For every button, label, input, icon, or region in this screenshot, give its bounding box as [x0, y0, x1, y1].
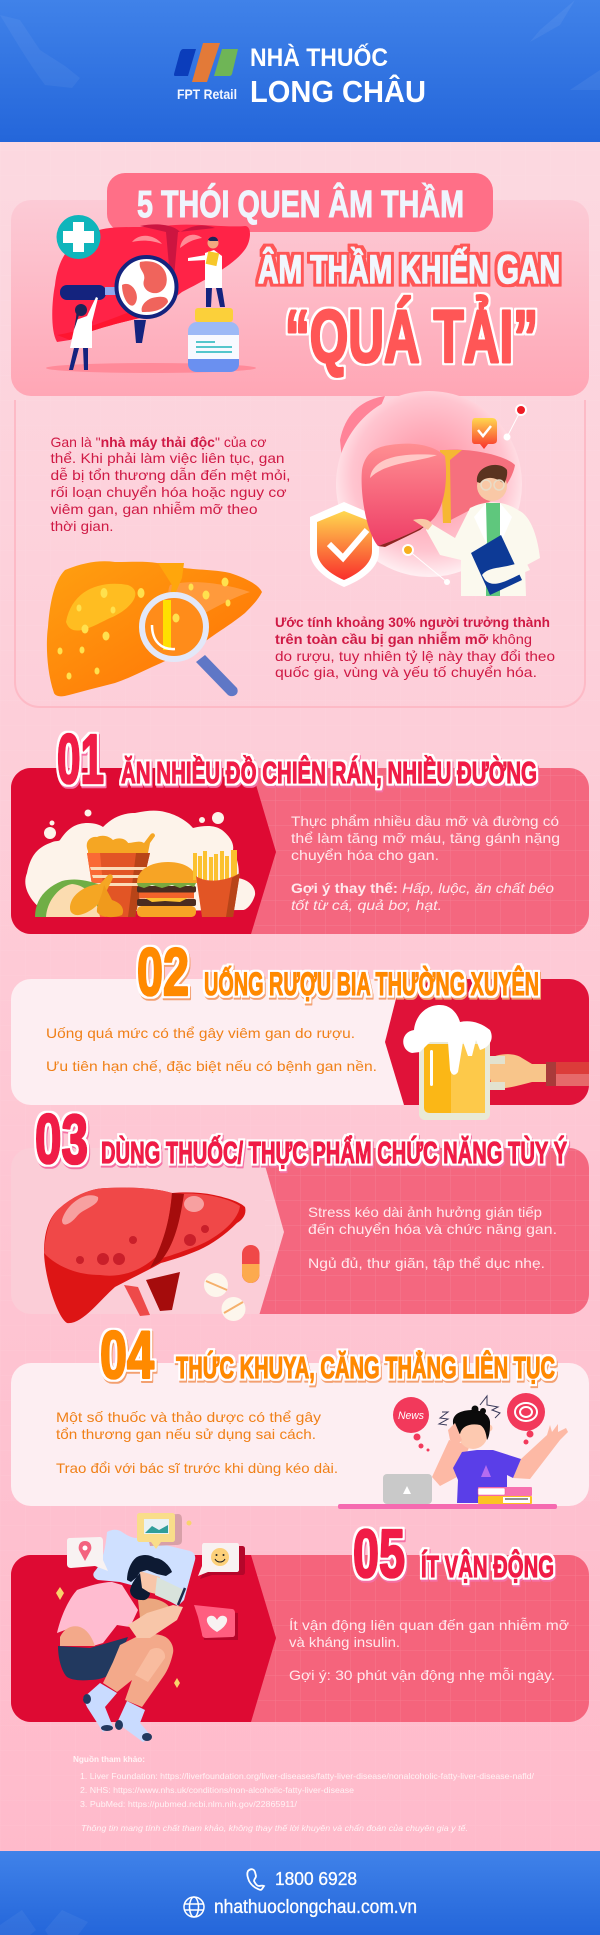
- doctor: man: [188, 237, 225, 307]
- icon: check badge: [472, 418, 497, 449]
- pink liver: [362, 444, 515, 547]
- footer band: [0, 1851, 600, 1935]
- text 01: chuyển hóa cho gan.: [291, 847, 439, 863]
- pill bottle: [188, 308, 239, 372]
- icon: medical cross: [56, 215, 100, 259]
- references: Thông tin mang tính chất tham khảo, không thay thế lời khuyên và chẩn đoán của chuyên gia y tế.: [81, 1823, 468, 1833]
- laptop: [383, 1474, 432, 1504]
- text 03: Ngủ đủ, thư giãn, tập thể dục nhẹ.: [308, 1255, 545, 1271]
- fries: [193, 850, 240, 917]
- brand name: [250, 42, 426, 109]
- website: nhathuoclongchau.com.vn: [214, 1897, 417, 1918]
- bubble: location pin: [67, 1537, 108, 1571]
- panel: 04: [11, 1318, 589, 1509]
- text 02: [46, 1025, 377, 1074]
- arm: [128, 1605, 183, 1638]
- connector dots: [402, 404, 527, 585]
- references: 2. NHS: https://www.nhs.uk/conditions/non-alcoholic-fatty-liver-disease: [80, 1785, 354, 1795]
- illustration: beer mug and hand: [403, 1005, 589, 1120]
- shirt: [57, 1582, 138, 1646]
- brand name: NHÀ THUỐC: [250, 42, 388, 72]
- phone number: 1800 6928: [275, 1869, 357, 1889]
- heading 04: [100, 1318, 555, 1393]
- legs: [103, 1634, 173, 1707]
- head: [127, 1555, 185, 1605]
- panel: 03: [11, 1100, 589, 1323]
- text 03: đến chuyển hóa và chức năng gan.: [308, 1221, 557, 1237]
- intro paragraph: thời gian.: [50, 518, 114, 534]
- bubble: smiley: [198, 1543, 245, 1579]
- heading 03: [35, 1100, 567, 1178]
- illustration: liver with doctors and magnifier: [46, 215, 256, 373]
- stats paragraph: trên toàn cầu bị gan nhiễm mỡ không: [275, 631, 532, 647]
- socks: [83, 1683, 152, 1742]
- intro paragraph: dễ bị tổn thương dẫn đến mệt mỏi,: [50, 467, 290, 483]
- text 01: Thực phẩm nhiều dầu mỡ và đường có: [291, 813, 559, 829]
- chest: [138, 1598, 170, 1618]
- icon: phone: [247, 1869, 264, 1890]
- heading 05: [353, 1516, 554, 1592]
- text 05: và kháng insulin.: [289, 1634, 400, 1650]
- text 03: Stress kéo dài ảnh hưởng gián tiếp: [308, 1204, 542, 1220]
- pills: [204, 1245, 260, 1321]
- stats paragraph: Ước tính khoảng 30% người trưởng thành: [275, 614, 550, 630]
- heading 02: [137, 935, 539, 1010]
- bubble: heart: [194, 1605, 238, 1640]
- stats paragraph: quốc gia, vùng và yếu tố chuyển hóa.: [275, 664, 537, 680]
- bubble: news: News: [398, 1410, 424, 1422]
- text 02: Ưu tiên hạn chế, đặc biệt nếu có bệnh gan nền.: [46, 1058, 377, 1074]
- brand name: LONG CHÂU: [250, 73, 426, 109]
- header band: [0, 0, 600, 142]
- panel: 05: [11, 1513, 589, 1742]
- stats paragraph: do rượu, tuy nhiên tỷ lệ này thay đổi theo: [275, 648, 555, 664]
- bubble: scribble: [507, 1393, 545, 1444]
- intro paragraph: Gan là "nhà máy thải độc" của cơ: [50, 434, 266, 450]
- heading 04: 04: [100, 1318, 154, 1393]
- heading 03: 03: [35, 1100, 88, 1178]
- text 02: Uống quá mức có thể gây viêm gan do rượu.: [46, 1025, 355, 1041]
- text 05: [289, 1617, 569, 1683]
- main heading: [258, 246, 560, 378]
- text 01: tốt từ cá, quả bơ, hạt.: [291, 897, 442, 913]
- illustration: red liver with pills: [44, 1188, 260, 1323]
- text 03: [308, 1204, 557, 1271]
- chicken pieces: [70, 874, 123, 917]
- doctor: woman: [69, 297, 98, 370]
- burger: [137, 862, 197, 917]
- text 04: Một số thuốc và thảo dược có thể gây: [56, 1409, 321, 1425]
- panel: 02: [11, 935, 589, 1120]
- heading 05: 05: [353, 1516, 405, 1592]
- pillow: [93, 1530, 195, 1606]
- taco: [35, 880, 100, 917]
- heading 01: 01: [57, 720, 104, 798]
- doctor: [413, 465, 540, 596]
- references: 3. PubMed: https://pubmed.ncbi.nlm.nih.gov/22865911/: [80, 1799, 298, 1809]
- references: 1. Liver Foundation: https://liverfoundation.org/liver-diseases/fatty-liver-disease/nonalcoholic-fatty-liver-disease-nafld/: [80, 1771, 535, 1781]
- text 01: thể làm tăng mỡ máu, tăng gánh nặng: [291, 830, 560, 846]
- bubble: news: [393, 1397, 430, 1452]
- text 05: Ít vận động liên quan đến gan nhiễm mỡ: [289, 1617, 569, 1633]
- intro paragraph: viêm gan, gan nhiễm mỡ theo: [50, 501, 258, 517]
- panel: 01: [11, 720, 589, 934]
- heading 02: 02: [137, 935, 189, 1010]
- logo: FPT Retail: [174, 43, 238, 102]
- text 01: [291, 813, 560, 913]
- heading 01: [57, 720, 537, 798]
- illustration: fast food: [25, 810, 255, 917]
- intro paragraph: thể. Khi phải làm việc liên tục, gan: [50, 450, 284, 466]
- text 01: Gợi ý thay thế: Hấp, luộc, ăn chất béo: [291, 880, 554, 896]
- references: [73, 1754, 535, 1833]
- text 04: tổn thương gan nếu sử dụng sai cách.: [56, 1426, 316, 1442]
- illustration: doctor with liver in bubble: [310, 391, 540, 596]
- text 04: Trao đổi với bác sĩ trước khi dùng kéo dài.: [56, 1460, 338, 1476]
- panel: intro: [15, 400, 585, 707]
- bubble: photo: [137, 1513, 182, 1549]
- stats paragraph: [275, 614, 555, 680]
- illustration: fatty orange liver: [47, 561, 262, 696]
- text 04: [56, 1409, 338, 1476]
- magnifier: [142, 595, 238, 696]
- magnifier: [60, 257, 176, 317]
- liver vessel: [134, 320, 146, 343]
- illustration: stressed person: [338, 1393, 568, 1509]
- books: [478, 1487, 532, 1504]
- intro paragraph: rối loạn chuyển hóa hoặc nguy cơ: [50, 484, 286, 500]
- shorts: [58, 1637, 128, 1680]
- illustration: person lying with phone: [56, 1513, 245, 1742]
- icon: globe: [184, 1897, 204, 1917]
- references: Nguồn tham khảo:: [73, 1754, 145, 1764]
- chicken bucket: [87, 833, 155, 917]
- title badge: 5 THÓI QUEN ÂM THẦM: [137, 182, 464, 226]
- title panel: [11, 200, 589, 396]
- logo: FPT Retail: FPT Retail: [177, 86, 237, 102]
- text 05: Gợi ý: 30 phút vận động nhẹ mỗi ngày.: [289, 1667, 555, 1683]
- shield: [310, 502, 379, 587]
- title badge: [107, 173, 493, 232]
- intro paragraph: [50, 434, 290, 534]
